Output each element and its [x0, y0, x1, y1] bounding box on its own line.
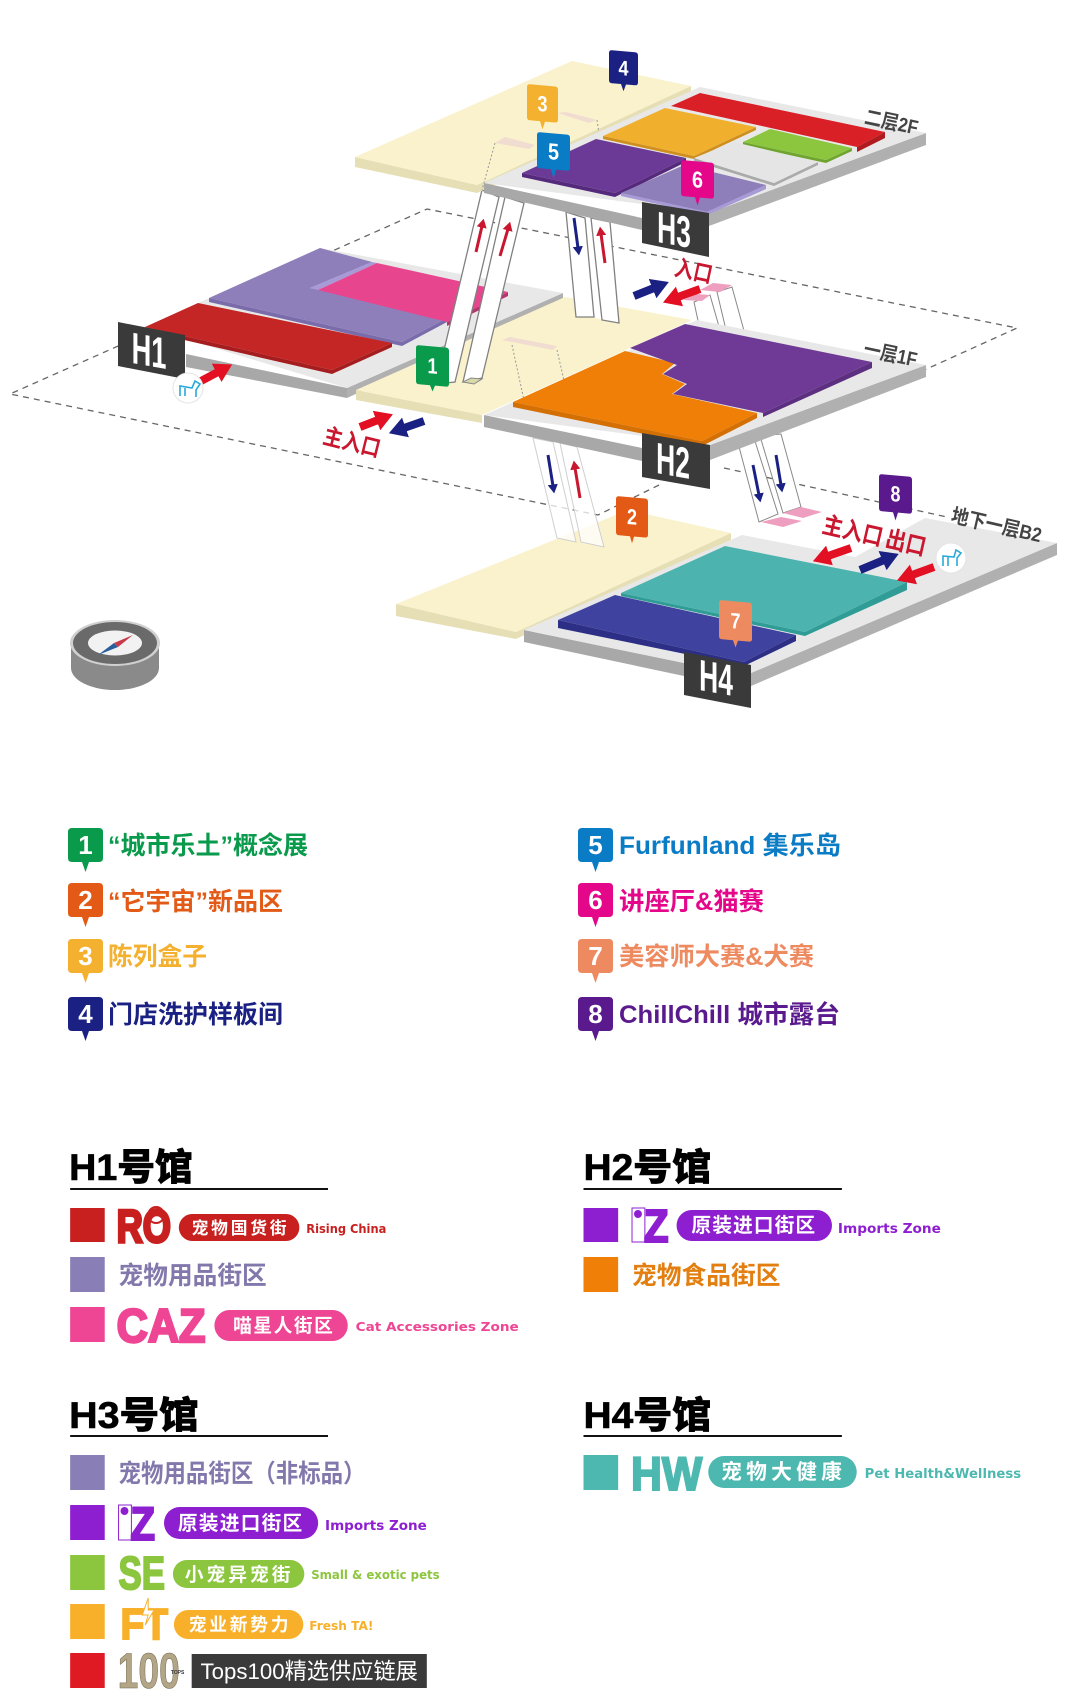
legend 3: 3 [78, 941, 93, 971]
main entrance arrows [360, 420, 424, 428]
map pin 3: 3 [537, 91, 547, 117]
H1 arrow and dog icon [173, 372, 218, 403]
row: rising china [70, 1201, 386, 1252]
panel: H1 hall [69, 1147, 519, 1352]
map pin 7: 7 [730, 608, 740, 634]
map pin 8: 8 [890, 481, 900, 507]
zone: red rising china [145, 303, 392, 374]
zone: lavender non-standard [621, 165, 766, 215]
label: B2 main entrance and exit [820, 511, 929, 561]
heading H3: H3号馆 [69, 1395, 199, 1436]
tag: H1 [118, 322, 185, 379]
legend 3 [68, 939, 207, 983]
legend 2: 2 [78, 885, 93, 915]
right entrance escalators [683, 283, 746, 338]
legend 3: 陈列盒子 [108, 942, 207, 971]
row: imports zone: 原装进口街区 [178, 1513, 302, 1535]
row: tops100: TOPS [171, 1670, 185, 1676]
map pin 5 [537, 132, 570, 180]
row: pet food: 宠物食品街区 [632, 1262, 781, 1290]
row: cat accessories: Cat Accessories Zone [356, 1319, 519, 1334]
zone: purple imports [630, 324, 872, 417]
legend 7 [578, 939, 814, 983]
row: non-standard supplies [70, 1455, 366, 1490]
floor: basement B2 [396, 504, 1057, 708]
label: main entrance: 主入口 [321, 423, 383, 462]
B2 cream zone [396, 510, 731, 639]
panel: H4 hall [583, 1395, 1021, 1500]
row: pet food [584, 1257, 781, 1292]
legend 1 [68, 828, 308, 872]
row: fresh ta [70, 1598, 373, 1649]
zone: orange pet food [513, 351, 757, 446]
zone: light gray [694, 142, 818, 186]
row: small and exotic pets [70, 1548, 440, 1599]
legend 1: 1 [78, 830, 93, 860]
legend 6 [578, 883, 764, 927]
legend 7: 美容师大赛&犬赛 [619, 942, 814, 971]
map pin 6 [681, 160, 714, 207]
2F cream zone [355, 61, 691, 193]
legend 6: 6 [588, 885, 603, 915]
lower left escalators [533, 438, 604, 547]
row: imports zone: Imports Zone [838, 1222, 941, 1237]
zone: purple imports [522, 139, 686, 197]
H4 gray plate [524, 518, 1057, 686]
icon: compass [70, 620, 160, 690]
legend 6: 讲座厅&猫赛 [619, 887, 764, 916]
tag: H3 [642, 202, 709, 258]
zone: teal pet health [621, 546, 907, 636]
icon: dog in circle [936, 543, 966, 573]
row: imports zone: Z [130, 1498, 155, 1550]
row: cat accessories [70, 1300, 519, 1352]
legend 1: “城市乐土”概念展 [108, 831, 308, 860]
zone: pink cat accessories [318, 263, 508, 326]
label: B2 main entrance and exit: 主入口 [820, 511, 886, 551]
map pin 2: 2 [627, 504, 637, 530]
row: pet health [584, 1448, 1021, 1500]
upper middle escalators [566, 212, 619, 323]
row: rising china: Rising China [306, 1221, 386, 1236]
panel: H3 hall [69, 1395, 440, 1696]
lower right escalators [738, 434, 822, 527]
H2 gray plate [484, 320, 926, 461]
row: pet health: Pet Health&Wellness [865, 1467, 1021, 1482]
legend 7: 7 [588, 941, 603, 971]
map pin 4 [609, 50, 638, 93]
zone: orange fresh [603, 108, 756, 159]
row: small and exotic pets: 小宠异宠街 [185, 1563, 291, 1586]
legend 5: 5 [588, 830, 603, 860]
upper left escalators [436, 190, 524, 384]
1F cream zone [356, 297, 692, 423]
row: pet health: 宠物大健康 [721, 1460, 842, 1484]
dashed floor outline [10, 209, 1017, 517]
floor: 1F [118, 248, 926, 489]
legend 4: 4 [78, 999, 93, 1029]
tag: H2 [642, 433, 710, 489]
map pin 5: 5 [548, 138, 559, 165]
row: imports zone: 原装进口街区 [691, 1214, 815, 1237]
row: tops100 [70, 1643, 427, 1696]
label: B2 main entrance and exit: 出口 [883, 525, 929, 561]
map pin 4: 4 [618, 57, 629, 81]
label: B2 floor name: 地下一层B2 [949, 504, 1044, 547]
row: small and exotic pets: SE [119, 1548, 165, 1599]
floor: 2F [355, 61, 926, 258]
map pin 1 [416, 345, 449, 393]
row: imports zone: Z [644, 1201, 669, 1252]
map pin 1: 1 [427, 353, 437, 379]
row: pet health: HW [631, 1448, 703, 1500]
row: imports zone [70, 1498, 427, 1550]
row: rising china: 宠物国货街 [192, 1218, 287, 1238]
right entrance arrows [634, 288, 700, 297]
row: cat accessories: CAZ [117, 1300, 206, 1352]
row: pet supplies [70, 1257, 267, 1292]
label: entrance: 入口 [672, 255, 715, 288]
1F small pad [502, 337, 565, 405]
legend 4: 门店洗护样板间 [108, 1001, 283, 1029]
map pin 2 [616, 496, 648, 545]
B2 entrance arrows [828, 548, 934, 575]
row: imports zone [584, 1201, 941, 1252]
H1 gray plate [145, 248, 563, 398]
row: small and exotic pets: Small & exotic pets [311, 1567, 440, 1582]
tag: H4 [684, 650, 751, 708]
legend 8 [578, 997, 840, 1041]
map pin 6: 6 [692, 166, 703, 193]
map pin 7 [719, 600, 752, 649]
map pin 3 [527, 84, 558, 131]
legend 8: 8 [588, 999, 603, 1029]
tag: H4: H4 [699, 650, 733, 706]
zone: navy [558, 595, 796, 666]
tag: H2: H2 [656, 433, 690, 489]
row: fresh ta: 宠业新势力 [189, 1614, 288, 1635]
legend 2: “它宇宙”新品区 [108, 888, 283, 916]
legend 4 [68, 997, 283, 1041]
legend 5 [578, 828, 841, 872]
heading H4: H4号馆 [583, 1395, 711, 1436]
legend 8: ChillChill 城市露台 [619, 1000, 840, 1029]
heading H1: H1号馆 [69, 1147, 193, 1188]
zone: red tops100 [671, 93, 885, 152]
row: fresh ta: Fresh TA! [309, 1618, 373, 1633]
legend 2 [68, 883, 283, 927]
row: rising china: RO [117, 1201, 171, 1252]
tag: H1: H1 [132, 323, 166, 379]
2F small pads [482, 112, 600, 190]
H3 gray plate [484, 87, 926, 230]
row: cat accessories: 喵星人街区 [233, 1315, 333, 1337]
row: fresh ta: FT [121, 1600, 168, 1649]
zone: lavender pet supplies [209, 248, 447, 346]
row: imports zone: Imports Zone [325, 1519, 427, 1534]
label: 1F floor name: 一层1F [862, 339, 919, 372]
zone: green small pets [743, 129, 852, 163]
heading H2: H2号馆 [583, 1147, 711, 1188]
row: tops100: Tops100精选供应链展 [201, 1659, 418, 1684]
panel: H2 hall [583, 1147, 941, 1292]
row: pet supplies: 宠物用品街区 [119, 1262, 267, 1290]
row: non-standard supplies: 宠物用品街区（非标品） [119, 1460, 366, 1488]
legend: numbered locations [68, 828, 841, 1041]
tag: H3: H3 [657, 202, 691, 258]
legend 5: Furfunland 集乐岛 [619, 832, 841, 860]
label: 2F floor name: 二层2F [863, 107, 920, 140]
map pin 8 [879, 474, 912, 522]
